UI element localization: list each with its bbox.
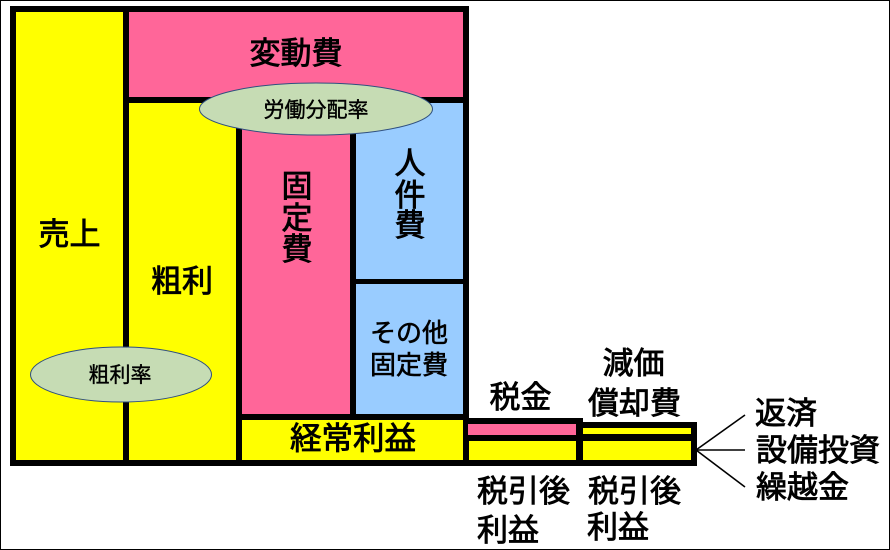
main black frame: [10, 6, 469, 466]
panel: variable costs: [129, 12, 463, 97]
label: uses of profit: 返済: [755, 396, 817, 431]
callout: gross margin ellipse: [30, 347, 212, 402]
panel: tax and after-tax profit: [463, 418, 583, 466]
label: after-tax profit right: 利益: [587, 510, 649, 545]
callout: gross margin ellipse: 粗利率: [88, 364, 152, 387]
panel: gross profit: 粗利: [151, 264, 213, 299]
panel: other fixed costs: [356, 284, 463, 414]
label: uses of profit: 設備投資: [756, 433, 880, 468]
panel: other fixed costs: その他: [370, 318, 448, 348]
label: after-tax profit right: 税引後: [588, 474, 681, 509]
panel: gross profit: [129, 103, 236, 460]
arrow lines: uses of profit: [696, 415, 745, 487]
panel: personnel costs: 件: [394, 178, 426, 213]
label: after-tax profit left: 利益: [477, 513, 539, 548]
panel: personnel costs: 費: [394, 208, 426, 243]
label: depreciation: 減価: [602, 346, 664, 381]
panel: fixed costs: 固: [282, 169, 312, 204]
panel: variable costs: 変動費: [250, 36, 342, 71]
label: tax: 税金: [490, 380, 552, 415]
panel: fixed costs: [242, 103, 350, 414]
callout: labor share ellipse: 労働分配率: [264, 99, 368, 122]
label: after-tax profit left: 税引後: [477, 474, 570, 509]
panel: ordinary profit: [242, 420, 463, 460]
panel: fixed costs: 費: [282, 232, 312, 267]
panel: fixed costs: 定: [282, 201, 312, 236]
panel: ordinary profit: 経常利益: [290, 420, 416, 456]
label: depreciation: 償却費: [588, 386, 681, 421]
panel: personnel costs: 人: [394, 146, 426, 181]
label: uses of profit: 繰越金: [756, 470, 849, 505]
panel: depreciation and after-tax profit: [580, 422, 697, 466]
panel: personnel costs: [356, 103, 463, 279]
panel: sales: 売上: [38, 217, 100, 252]
panel: sales: [16, 12, 123, 460]
panel: other fixed costs: 固定費: [370, 350, 448, 380]
callout: labor share ellipse: [200, 83, 432, 135]
